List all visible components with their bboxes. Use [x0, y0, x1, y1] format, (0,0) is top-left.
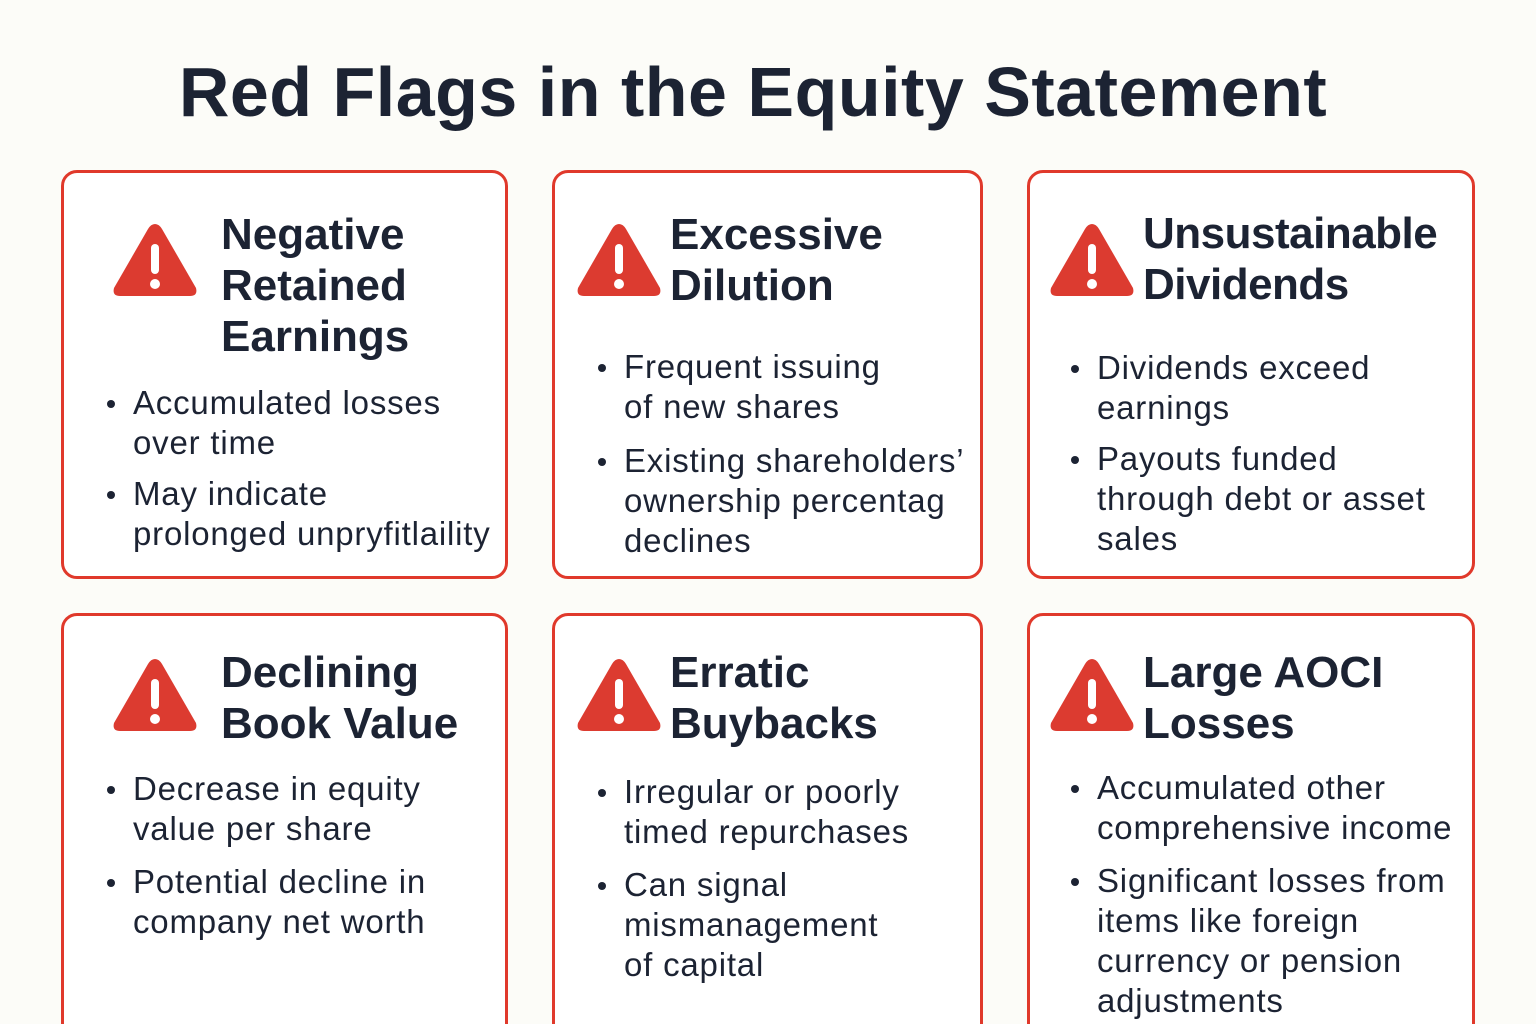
bullets: Existing shareholders’ [624, 442, 964, 479]
panel: negative retained earnings [61, 170, 508, 579]
panel: declining book value [61, 613, 508, 1024]
icon: warning [578, 224, 660, 296]
heading [670, 210, 883, 310]
bullets: Potential decline in [133, 863, 426, 900]
panel: excessive dilution [552, 170, 983, 579]
icon: warning [114, 224, 196, 296]
bullets [598, 348, 964, 559]
bullets: prolonged unpryfitlaility [133, 515, 491, 552]
bullets: adjustments [1097, 982, 1284, 1019]
bullets: mismanagement [624, 906, 878, 943]
bullets: currency or pension [1097, 942, 1402, 979]
heading: Retained [221, 261, 407, 310]
bullets [107, 384, 491, 552]
heading [221, 648, 458, 748]
bullets: ownership percentag [624, 482, 946, 519]
bullets: Frequent issuing [624, 348, 881, 385]
title: Red Flags in the Equity Statement [179, 53, 1327, 131]
heading [1143, 648, 1383, 748]
bullets: earnings [1097, 389, 1230, 426]
bullets: items like foreign [1097, 902, 1359, 939]
bullets [1071, 349, 1426, 557]
bullets: Dividends exceed [1097, 349, 1370, 386]
bullets: sales [1097, 520, 1178, 557]
bullets: Irregular or poorly [624, 773, 900, 810]
panel: unsustainable dividends [1027, 170, 1475, 579]
bullets: company net worth [133, 903, 425, 940]
panel: erratic buybacks [552, 613, 983, 1024]
bullets: declines [624, 522, 751, 559]
heading: Losses [1143, 699, 1295, 748]
bullets: of capital [624, 946, 764, 983]
heading: Negative [221, 210, 404, 259]
bullets: comprehensive income [1097, 809, 1452, 846]
heading: Dividends [1143, 260, 1349, 309]
bullets: Significant losses from [1097, 862, 1446, 899]
icon: warning [114, 659, 196, 731]
bullets: over time [133, 424, 276, 461]
bullets: Accumulated other [1097, 769, 1386, 806]
heading: Excessive [670, 210, 883, 259]
heading: Declining [221, 648, 419, 697]
bullets: of new shares [624, 388, 840, 425]
bullets: Decrease in equity [133, 770, 421, 807]
heading: Erratic [670, 648, 809, 697]
bullets: May indicate [133, 475, 328, 512]
heading: Earnings [221, 312, 409, 361]
bullets [107, 770, 426, 940]
bullets [1071, 769, 1452, 1019]
panel: large AOCI losses [1027, 613, 1475, 1024]
heading [1143, 209, 1437, 309]
bullets [598, 773, 909, 983]
bullets: value per share [133, 810, 372, 847]
heading: Large AOCI [1143, 648, 1383, 697]
bullets: through debt or asset [1097, 480, 1426, 517]
bullets: timed repurchases [624, 813, 909, 850]
heading: Book Value [221, 699, 458, 748]
heading [221, 210, 409, 361]
heading: Buybacks [670, 699, 878, 748]
icon: warning [1050, 659, 1134, 731]
icon: warning [578, 659, 660, 731]
bullets: Can signal [624, 866, 788, 903]
bullets: Accumulated losses [133, 384, 441, 421]
heading: Unsustainable [1143, 209, 1437, 258]
icon: warning [1050, 224, 1134, 296]
heading: Dilution [670, 261, 834, 310]
heading [670, 648, 878, 748]
bullets: Payouts funded [1097, 440, 1338, 477]
